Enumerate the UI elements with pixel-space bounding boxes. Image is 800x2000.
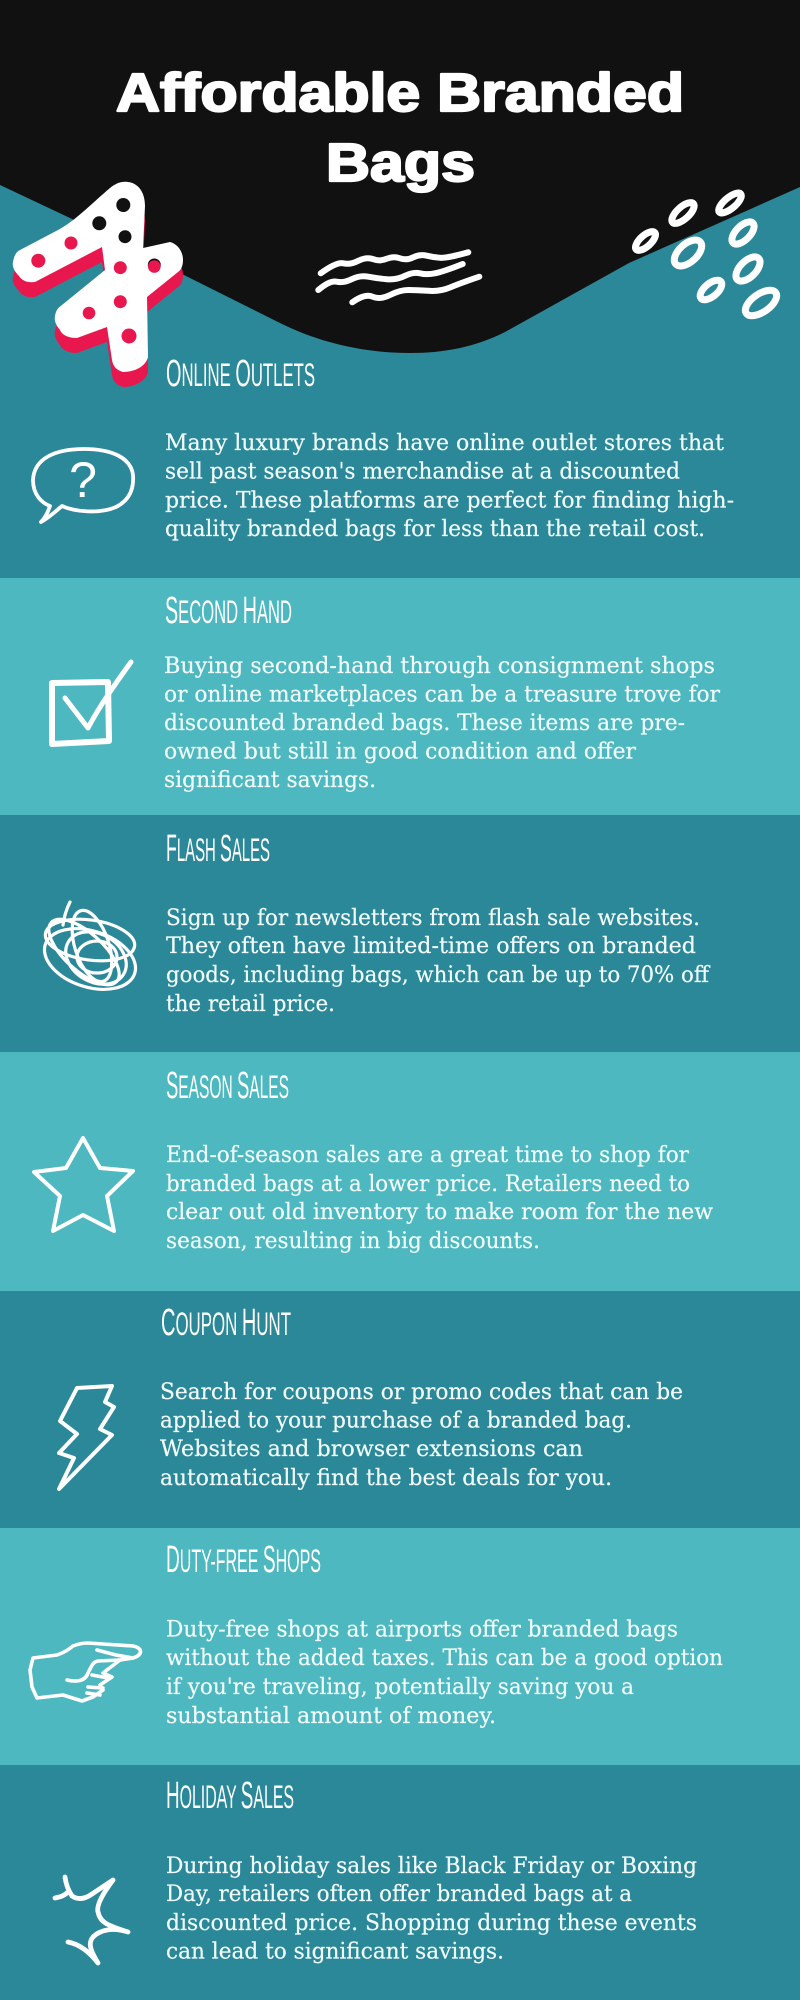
text block: second hand: significant savings.: [164, 767, 376, 793]
text block: online outlets: [165, 430, 734, 542]
icon: polka dot shape with red shadow: [13, 182, 183, 387]
text block: coupon hunt: [160, 1379, 683, 1491]
text block: duty-free shops: Duty-free shops at airports offer branded bags: [166, 1617, 678, 1643]
text block: holiday sales: discounted price. Shopping during these events: [166, 1910, 697, 1936]
icon: checkbox: [52, 662, 131, 744]
text block: holiday sales: During holiday sales like Black Friday or Boxing: [166, 1853, 697, 1879]
text block: season sales: clear out old inventory to make room for the new: [166, 1199, 713, 1225]
text block: season sales: branded bags at a lower price. Retailers need to: [166, 1171, 690, 1197]
text block: holiday sales: [166, 1853, 697, 1964]
heading: flash sales: FLASH SALES: [166, 828, 270, 870]
text block: duty-free shops: [166, 1617, 723, 1729]
text block: online outlets: quality branded bags for less than the retail cost.: [165, 516, 705, 542]
text block: duty-free shops: substantial amount of money.: [166, 1703, 496, 1729]
panel: duty-free shops: [0, 1528, 800, 1765]
text block: flash sales: goods, including bags, which can be up to 70% off: [166, 962, 711, 988]
heading: duty-free shops: DUTY-FREE SHOPS: [166, 1539, 321, 1581]
text block: coupon hunt: applied to your purchase of a branded bag.: [160, 1408, 632, 1434]
icon: lightning bolt: [59, 1386, 114, 1489]
panel: second hand: [0, 578, 800, 815]
title: Affordable Branded: [116, 63, 684, 123]
text block: duty-free shops: without the added taxes. This can be a good option: [166, 1645, 723, 1671]
title: [116, 63, 684, 193]
text block: holiday sales: Day, retailers often offer branded bags at a: [166, 1881, 632, 1907]
panel: season sales: [0, 1052, 800, 1291]
text block: second hand: Buying second-hand through consignment shops: [164, 653, 715, 679]
panel: coupon hunt: [0, 1291, 800, 1528]
text block: online outlets: sell past season's merchandise at a discounted: [165, 459, 680, 485]
icon: starburst: [55, 1877, 128, 1963]
text block: flash sales: the retail price.: [166, 991, 335, 1017]
icon: star: [34, 1138, 133, 1231]
icon: speech bubble with question mark: ?: [69, 452, 97, 508]
icon: pointing hand: [30, 1643, 140, 1701]
text block: season sales: [166, 1142, 713, 1254]
text block: flash sales: [166, 905, 711, 1017]
text block: season sales: End-of-season sales are a great time to shop for: [166, 1142, 689, 1168]
text block: online outlets: price. These platforms are perfect for finding high-: [165, 487, 734, 513]
panel: online outlets: [0, 0, 800, 578]
icon: white rings: [633, 190, 781, 321]
header: black curved shape: [0, 0, 800, 353]
title: Bags: [326, 133, 475, 193]
heading: online outlets: ONLINE OUTLETS: [166, 353, 315, 395]
heading: coupon hunt: COUPON HUNT: [161, 1302, 291, 1344]
text block: second hand: discounted branded bags. These items are pre-: [164, 710, 685, 736]
text block: duty-free shops: if you're traveling, potentially saving you a: [166, 1674, 634, 1700]
text block: coupon hunt: Websites and browser extensions can: [160, 1436, 583, 1462]
text block: second hand: or online marketplaces can be a treasure trove for: [164, 682, 720, 708]
text block: season sales: season, resulting in big discounts.: [166, 1228, 540, 1254]
text block: holiday sales: can lead to significant savings.: [166, 1938, 504, 1964]
heading: season sales: SEASON SALES: [166, 1065, 289, 1107]
icon: wavy lines: [318, 252, 479, 302]
icon: scribble: [37, 902, 143, 1000]
text block: flash sales: Sign up for newsletters from flash sale websites.: [166, 905, 700, 931]
panel: holiday sales: [0, 1765, 800, 2000]
icon: speech bubble with question mark: [33, 449, 133, 522]
text block: online outlets: Many luxury brands have online outlet stores that: [165, 430, 724, 456]
heading: holiday sales: HOLIDAY SALES: [166, 1775, 294, 1817]
panel: flash sales: [0, 815, 800, 1052]
text block: second hand: owned but still in good condition and offer: [164, 739, 636, 765]
text block: coupon hunt: Search for coupons or promo codes that can be: [160, 1379, 683, 1405]
heading: second hand: SECOND HAND: [165, 590, 292, 632]
text block: flash sales: They often have limited-time offers on branded: [166, 933, 696, 959]
text block: second hand: [164, 653, 720, 793]
text block: coupon hunt: automatically find the best deals for you.: [160, 1465, 612, 1491]
